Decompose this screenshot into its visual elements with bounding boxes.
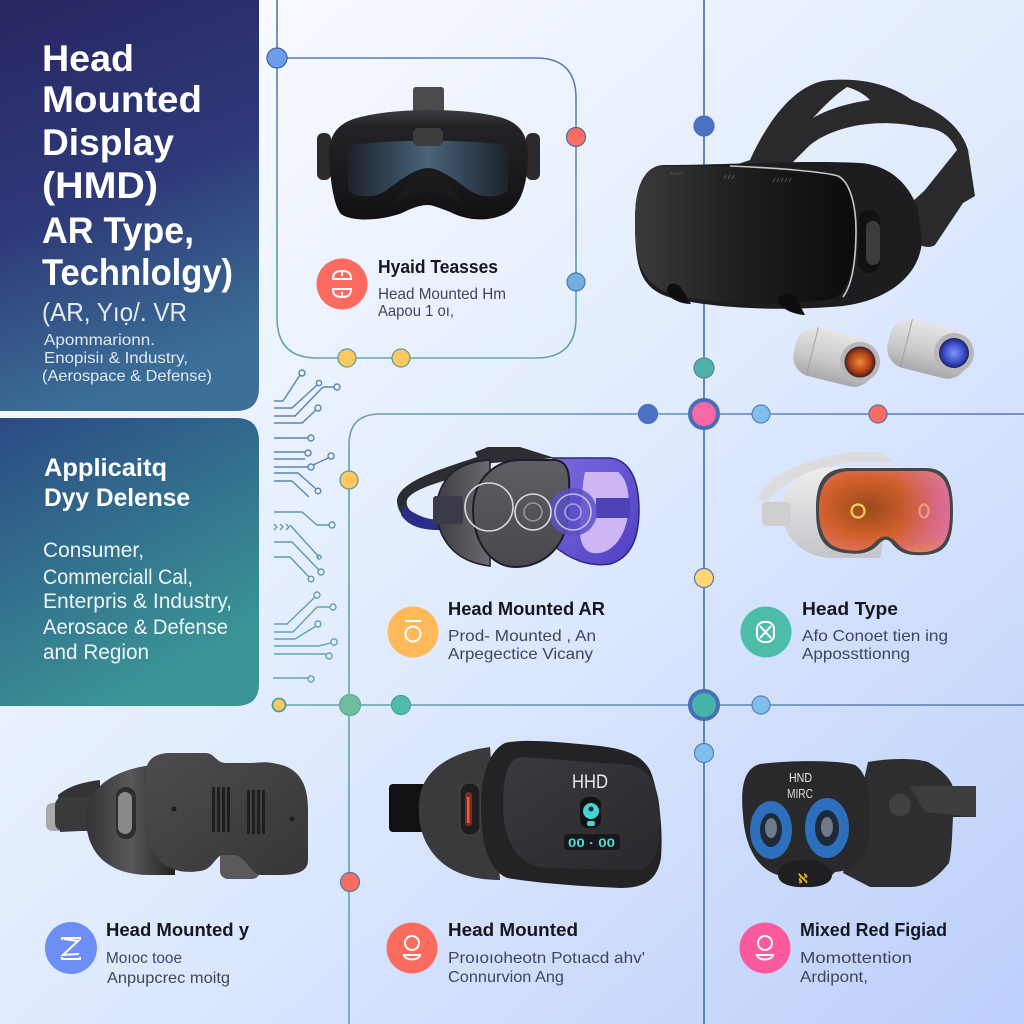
card: Head Mounted [386, 741, 662, 986]
subtitle: (AR, Yıọ/. VR [42, 297, 187, 327]
text: card label [800, 920, 947, 986]
card: Head Mounted AR [388, 447, 639, 663]
icon: badge [316, 258, 368, 310]
text: card label: Afo Conoet tien ing [802, 628, 948, 645]
panel: title [0, 0, 259, 411]
heading: application: Dyy Delense [44, 484, 190, 512]
text: card label: Head Mounted Hm [378, 286, 506, 303]
heading: application [44, 454, 190, 512]
icon: badge [388, 606, 438, 658]
heading: main title: (HMD) [42, 165, 158, 206]
text block: application list: and Region [43, 641, 149, 664]
text block: application list: Enterpris & Industry, [43, 590, 232, 613]
text: card label: Connurvion Ang [448, 969, 564, 986]
heading: main title: Head [42, 38, 134, 79]
device: blue lens headset: MIRC [787, 786, 813, 801]
text: card label: Head Mounted y [106, 920, 249, 940]
text block: application list [43, 539, 232, 664]
device: large VR headset with straps [635, 80, 975, 315]
text block: segments: Apommarionn. [44, 332, 155, 349]
text: card label [106, 920, 249, 987]
heading: main title: Display [42, 122, 174, 163]
text: card label: Proıoıoheotn Potıacd ahv' [448, 950, 645, 967]
device: blue lens headset [742, 759, 976, 887]
card: Hyaid Teasses [316, 87, 540, 320]
icon: badge [740, 606, 792, 658]
text: card label [802, 599, 948, 663]
text: card label: Aapou 1 oı, [378, 303, 454, 320]
text block: segments [42, 332, 212, 385]
device: orange visor headset [758, 452, 953, 558]
heading: main title [42, 38, 233, 293]
text: card label: Head Mounted AR [448, 599, 605, 619]
text: card label [378, 257, 506, 320]
icon: badge [740, 922, 790, 974]
text: card label: Momottention [800, 950, 912, 967]
icon: badge [386, 922, 438, 974]
text: card label: Anpupcrec moitg [107, 970, 230, 987]
heading: application: Applicaitq [44, 454, 167, 482]
text block: segments: (Aerospace & Defense) [42, 368, 212, 385]
icon: badge [45, 922, 97, 974]
network lines and nodes [267, 0, 1024, 1024]
heading: main title: AR Type, [42, 210, 194, 251]
panel: application [0, 418, 259, 706]
device: goggle headset [317, 87, 540, 220]
icon: blue lens cylinder [883, 315, 975, 383]
text block: application list: Commerciall Cal, [43, 566, 193, 589]
text: card label: Mixed Red Figiad [800, 920, 947, 940]
device: grey rear-view headset [46, 753, 308, 879]
text block: application list: Aerosace & Defense [43, 616, 228, 639]
display readout: 00 · 00 [568, 836, 615, 850]
text: card label: Hyaid Teasses [378, 257, 498, 277]
on-device label: HHD [572, 772, 608, 793]
text: card label: Ardipont, [800, 969, 868, 986]
text: card label: Head Mounted [448, 920, 578, 940]
card: Mixed Red Figiad [740, 759, 976, 986]
card: Head Mounted y [45, 753, 308, 987]
on-device labels: HND [789, 770, 812, 785]
device: headset with display [389, 741, 662, 888]
text block: segments: Enopisiı & Industry, [44, 350, 188, 367]
text: card label: Arpegectice Vicany [448, 646, 593, 663]
text: card label [448, 920, 645, 986]
text block: application list: Consumer, [43, 539, 144, 562]
text: card label: Head Type [802, 599, 898, 619]
card: Head Type [740, 452, 953, 663]
text: card label: Appossttionng [802, 646, 910, 663]
device: transparent AR headset [397, 447, 639, 567]
text: card label: Prod- Mounted , An [448, 628, 596, 645]
icon: red lens cylinder [789, 323, 881, 391]
text: card label: Moıoc tooe [106, 950, 182, 967]
device: blue lens headset: ℵ [798, 871, 808, 886]
text: card label [448, 599, 605, 663]
heading: main title: Technlolgy) [42, 252, 233, 293]
circuit traces [273, 370, 340, 682]
heading: main title: Mounted [42, 79, 202, 120]
